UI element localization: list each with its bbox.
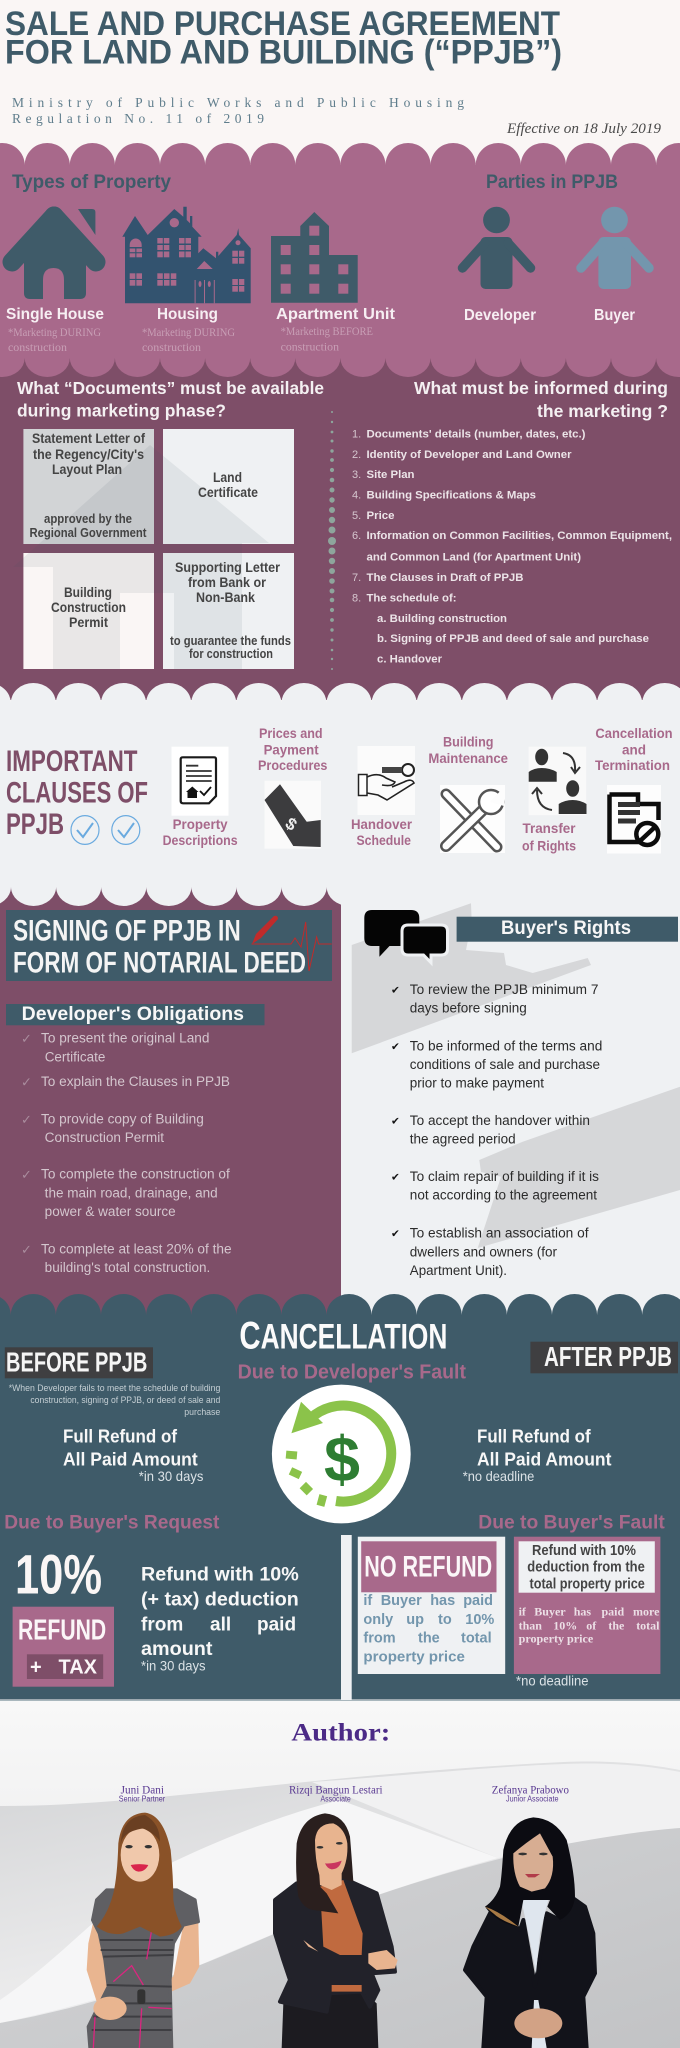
heading: important clauses: CLAUSES OF [6,777,148,810]
heading: important clauses: IMPORTANT [6,745,138,778]
rights checks [391,984,400,1240]
obligation text [41,1031,232,1275]
rights text: days before signing [410,1001,527,1016]
label: prices and payment [258,725,328,773]
dark mauve section background [0,340,680,700]
property labels: Single House [6,306,104,323]
panel: signing of PPJB background [0,887,341,1320]
obligation checks [21,1032,32,1258]
note: developer fails: construction, signing of PPJB, or deed of sale and [30,1395,220,1406]
label: transfer of rights: of Rights [522,838,576,854]
icon: money back: $ [324,1423,360,1495]
icon: price tag [264,781,321,849]
heading: buyer's request: Due to Buyer's Request [4,1512,220,1533]
heading: developer's fault: Due to Developer's Fault [238,1361,466,1383]
buyer's rights banner: Buyer's Rights [501,918,631,939]
property labels: Housing [157,306,218,323]
obligation checks: ✓ [21,1076,32,1090]
obligations banner: Developer's Obligations [22,1004,244,1025]
card text: supporting letter: to guarantee the funds [170,634,291,648]
refund description: *in 30 days [141,1658,206,1674]
obligation text: Construction Permit [45,1130,164,1145]
refund plus tax tag: + [30,1656,42,1678]
list items: Building Specifications & Maps [366,490,536,502]
panel: signing heading [6,910,332,981]
list numbers: 3. [352,469,361,481]
card: refund with deduction: deduction from the [527,1560,645,1576]
rights checks: ✔ [391,1172,400,1184]
card: no refund: the [418,1631,440,1647]
rights checks: ✔ [391,1116,400,1128]
card: no refund: only [363,1612,393,1628]
icon: check badges [71,816,140,844]
rights checks: ✔ [391,1228,400,1240]
list items: The schedule of: [366,593,456,605]
label: cancellation and termination: and [622,741,646,757]
label: cancellation and termination [595,725,673,773]
list numbers [352,429,361,605]
author heading: Author: [291,1720,390,1747]
card: refund with deduction: has [574,1605,591,1619]
card: refund with deduction: if [519,1605,527,1619]
author section [0,1700,680,2048]
heading: types of property: Types of Property [12,172,171,193]
obligation text: To complete at least 20% of the [41,1241,232,1256]
refund description: Refund with 10% [141,1565,299,1586]
signing title: SIGNING OF PPJB IN [13,915,241,948]
card: no refund: Buyer [381,1593,422,1609]
signing title: FORM OF NOTARIAL DEED [13,946,306,979]
rights text: the agreed period [410,1132,516,1147]
property labels: Apartment Unit [276,306,395,323]
label: cancellation and termination: Termination [595,757,670,773]
label: prices and payment: Prices and [259,725,323,741]
icon: buyer [581,207,649,289]
refund description: amount [141,1639,213,1660]
big number: 10% [15,1542,102,1605]
card: no refund: total [461,1631,492,1647]
obligation text: To provide copy of Building [41,1111,204,1126]
label: handover schedule [351,816,413,848]
rights text: To claim repair of building if it is [410,1169,599,1184]
panel: cancellation [4,1314,678,1700]
portrait [275,1813,398,2048]
obligation text: building's total construction. [45,1260,210,1275]
title: SALE AND PURCHASE AGREEMENT [5,5,560,43]
label: building maintenance [428,734,508,766]
party labels: Developer [464,307,536,324]
property notes: *Marketing BEFORE [281,324,373,338]
heading: documents: What “Documents” must be available [17,378,324,398]
card: no refund: property price [363,1650,465,1666]
name: Juni Dani [121,1784,164,1796]
label: property descriptions: Descriptions [163,832,238,848]
label: building maintenance: Building [443,734,494,750]
list numbers: 2. [352,449,361,461]
card: no refund: to [438,1612,452,1628]
rights text: To review the PPJB minimum 7 [410,982,598,997]
icon: pen and signature line [252,916,332,971]
card text: statement letter: Layout Plan [52,462,122,477]
list items: Price [366,510,394,522]
card text: building permit: Construction [51,600,126,615]
card text: statement letter: Regional Government [30,526,147,540]
panel: documents [13,378,324,669]
card text: statement letter [30,431,147,540]
label: transfer of rights: Transfer [522,820,576,836]
label: prices and payment: Procedures [258,757,328,773]
rights text: Apartment Unit). [410,1263,507,1278]
refund plus tax tag: REFUND [18,1614,106,1646]
card: refund with deduction: property price [519,1632,594,1646]
property notes: construction [8,340,67,354]
card text: building permit: Building [64,585,112,600]
card: refund with deduction: than [519,1618,542,1632]
mauve section with scallops [0,143,680,377]
cancellation title: CANCELLATION [239,1314,447,1357]
list items [366,429,672,666]
card: no refund: paid [463,1593,493,1609]
rights checks: ✔ [391,984,400,996]
before: full refund: *in 30 days [139,1468,203,1484]
icon: price tag: $ [282,814,301,835]
heading: informed during marketing [414,378,668,421]
obligation text: Certificate [45,1049,105,1064]
card: no refund: has [430,1593,455,1609]
card text: supporting letter: from Bank or [188,575,267,590]
card: refund with deduction: Refund with 10% [532,1543,636,1559]
before: full refund: All Paid Amount [63,1449,198,1469]
icon: transfer of rights [529,747,586,815]
icon: tools [440,785,505,853]
obligation text: To explain the Clauses in PPJB [41,1074,230,1089]
card: refund with deduction: the [608,1618,625,1632]
property notes: construction [142,340,201,354]
card text: supporting letter: Supporting Letter [175,560,281,575]
list items: b. Signing of PPJB and deed of sale and purchase [377,633,649,645]
obligation checks: ✓ [21,1243,32,1258]
heading: informed during marketing: the marketing ? [537,401,668,421]
obligation text: To present the original Land [41,1031,209,1046]
refund plus tax tag [13,1607,114,1687]
buyer's rights banner [457,917,678,942]
heading: documents [17,378,324,421]
light scallops over dark panel [0,887,372,906]
label: cancellation and termination: Cancellation [595,725,673,741]
card text: supporting letter [170,560,291,661]
card: refund with deduction: more [633,1605,660,1619]
card: refund with deduction: total [636,1618,660,1632]
label: handover schedule: Schedule [356,832,411,848]
label: handover schedule: Handover [351,816,413,832]
label: property descriptions: Property [173,816,228,832]
icon: speech bubbles [364,910,448,963]
card: refund with deduction: Buyer [534,1605,566,1619]
card: refund with deduction [514,1537,660,1674]
property notes [8,324,373,354]
heading: important clauses [6,745,148,841]
icon: developer [462,207,530,289]
after: full refund [463,1427,611,1484]
note: developer fails: *When Developer fails to meet the schedule of building [9,1383,220,1394]
panel: buyer's rights [364,910,678,1278]
heading: buyer's fault: Due to Buyer's Fault [478,1512,665,1533]
rights text: dwellers and owners (for [410,1244,557,1259]
regulation subtitle: Ministry of Public Works and Public Housing [12,95,464,110]
label: transfer of rights [522,820,576,854]
list numbers: 1. [352,429,361,441]
label: building maintenance: Maintenance [428,750,508,766]
effective date: Effective on 18 July 2019 [506,121,661,137]
author: Zefanya Prabowo [465,1784,595,2048]
card text: land certificate [198,470,258,500]
icon: cancellation document [607,785,661,854]
name [119,1784,165,1803]
obligation text: the main road, drainage, and [45,1185,218,1200]
before: full refund: Full Refund of [63,1427,178,1447]
icon: housing [122,207,251,303]
list numbers: 6. [352,530,361,542]
right panel gray shapes [352,903,680,1248]
list items: Site Plan [366,469,415,481]
obligation text: To complete the construction of [41,1167,230,1182]
name: Associate [320,1794,351,1803]
card: refund with deduction: paid [602,1605,625,1619]
party labels [464,307,635,324]
after: full refund: Full Refund of [477,1427,592,1447]
panel: types of property [6,172,395,354]
after: full refund: *no deadline [463,1468,534,1484]
refund description: from [141,1615,183,1636]
before PPJB tag: BEFORE PPJB [6,1347,147,1378]
dotted divider [328,411,336,670]
list items: a. Building construction [377,613,507,625]
title: FOR LAND AND BUILDING (“PPJB”) [5,34,562,72]
card: no refund: 10% [465,1612,494,1628]
rights text: prior to make payment [410,1076,544,1091]
list items: Identity of Developer and Land Owner [366,449,572,461]
signing title [13,915,306,979]
portrait [87,1813,199,2048]
list items: c. Handover [377,654,443,666]
card text: building permit: Permit [69,615,108,630]
refund description: paid [257,1615,296,1636]
icon: handover key [358,746,415,815]
note: developer fails: purchase [184,1407,220,1418]
card: no refund: NO REFUND [364,1551,492,1584]
card: refund with deduction: of [586,1618,597,1632]
regulation subtitle: Regulation No. 11 of 2019 [12,111,264,126]
list numbers: 8. [352,593,361,605]
obligation text: power & water source [45,1204,176,1219]
property notes: *Marketing DURING [8,325,101,339]
before: full refund [63,1427,203,1484]
name: Rizqi Bangun Lestari [289,1784,382,1796]
card: refund with deduction: 10% [553,1618,577,1632]
card text: statement letter: approved by the [44,512,132,526]
icon: property descriptions [172,747,228,816]
name: Zefanya Prabowo [492,1784,569,1796]
name: Senior Partner [119,1794,165,1803]
card: no refund: from [363,1631,396,1647]
header [5,5,661,137]
card text: statement letter: the Regency/City's [33,447,144,462]
panel: parties in PPJB [462,172,649,324]
card: no refund: if [363,1593,372,1609]
property labels [6,306,395,323]
white divider [341,1535,352,1700]
heading: important clauses: PPJB [6,808,64,841]
list items: Documents' details (number, dates, etc.) [366,429,586,441]
title [5,5,562,72]
card: no refund [358,1537,505,1674]
author: Rizqi Bangun Lestari [275,1784,398,2048]
author background swoosh [0,1700,680,2048]
property notes: construction [281,340,339,354]
portrait [465,1817,595,2048]
label: property descriptions [163,816,238,848]
card text: supporting letter: Non-Bank [196,590,255,605]
card: refund with deduction: total property price [530,1576,645,1592]
light section with scallops [0,683,680,1320]
icon: money back [272,1385,411,1523]
list numbers: 7. [352,572,361,584]
party labels: Buyer [594,307,635,324]
refund description: (+ tax) deduction [141,1590,299,1611]
panel: information list [352,378,672,666]
icon: single house [12,209,96,299]
heading: informed during marketing: What must be informed during [414,378,668,398]
note: no deadline: *no deadline [516,1673,589,1689]
rights text: To accept the handover within [410,1113,590,1128]
refund description [141,1565,299,1674]
card text: land certificate: Land [213,470,242,485]
name [289,1784,382,1803]
slate section with scallops [0,1294,680,1700]
panel: developer's obligations [6,1004,264,1275]
note: developer fails [9,1383,220,1418]
rights text: conditions of sale and purchase [410,1057,600,1072]
document cards [13,429,294,669]
card text: statement letter: Statement Letter of [32,431,145,446]
rights checks: ✔ [391,1041,400,1053]
rights text: To be informed of the terms and [410,1038,602,1053]
list items: The Clauses in Draft of PPJB [366,572,524,584]
name [492,1784,569,1803]
list numbers: 5. [352,510,361,522]
card text: building permit [51,585,126,630]
panel: important clauses [6,725,673,854]
obligation checks: ✓ [21,1168,32,1183]
card text: supporting letter: for construction [189,647,273,661]
refund plus tax tag: TAX [58,1656,98,1678]
heading: parties: Parties in PPJB [486,172,618,193]
after: full refund: All Paid Amount [477,1449,611,1469]
rights text [410,982,602,1278]
heading: documents: during marketing phase? [17,401,226,421]
name: Junior Associate [506,1794,559,1803]
property notes: *Marketing DURING [142,325,235,339]
list numbers: 4. [352,490,361,502]
card text: land certificate: Certificate [198,485,258,500]
list items: and Common Land (for Apartment Unit) [366,552,581,564]
regulation subtitle [12,95,464,126]
rights text: To establish an association of [410,1226,589,1241]
icon: apartment [271,212,358,303]
list items: Information on Common Facilities, Common Equipment, [366,530,672,542]
author: Juni Dani [87,1784,199,2048]
card: no refund: up [406,1612,424,1628]
obligation checks: ✓ [21,1113,32,1128]
label: prices and payment: Payment [264,741,319,757]
rights text: not according to the agreement [410,1188,597,1203]
obligation checks: ✓ [21,1032,32,1047]
refund description: all [210,1615,231,1636]
